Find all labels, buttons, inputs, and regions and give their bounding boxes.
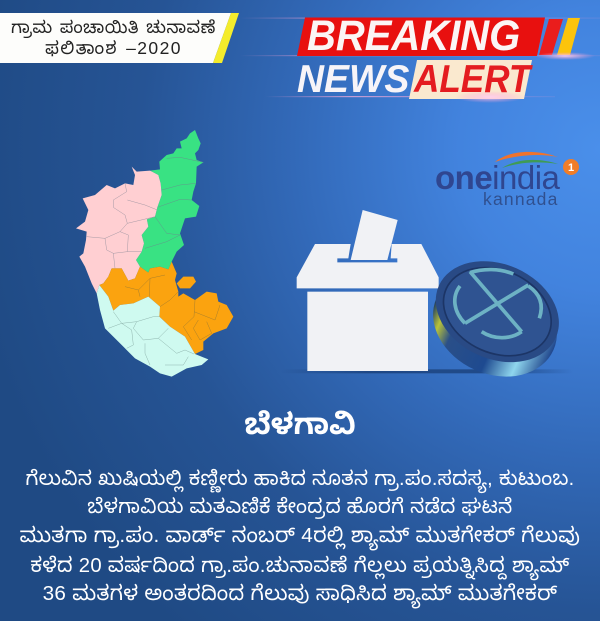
icon: ballot box: [296, 210, 564, 377]
map region: pale cyan south: [97, 285, 208, 377]
breaking news alert graphic: NEWS: [297, 58, 409, 101]
text line 3: ಮುತಗಾ ಗ್ರಾ.ಪಂ. ವಾರ್ಡ್ ನಂಬರ್ 4ರಲ್ಲಿ ಶ್ಯಾಮ್ ಮುತಗೇಕರ್ ಗೆಲುವು: [20, 524, 580, 547]
text line 5: 36 ಮತಗಳ ಅಂತರದಿಂದ ಗೆಲುವು ಸಾಧಿಸಿದ ಶ್ಯಾಮ್ ಮುತಗೇಕರ್: [43, 582, 557, 605]
header banner: election results: ಗ್ರಾಮ ಪಂಚಾಯಿತಿ ಚುನಾವಣೆ: [11, 18, 216, 37]
map region: pink north-west: [76, 167, 162, 293]
logo: oneindia kannada: kannada: [483, 189, 559, 209]
logo: oneindia kannada: oneindia: [435, 159, 559, 196]
breaking news alert graphic: [246, 12, 600, 102]
breaking news alert graphic: ALERT: [414, 58, 530, 101]
text line 2: ಬೆಳಗಾವಿಯ ಮತಎಣಿಕೆ ಕೇಂದ್ರದ ಹೊರಗೆ ನಡೆದ ಘಟನೆ: [87, 496, 513, 518]
icon: election symbol coin: [416, 242, 575, 396]
logo: oneindia kannada: [435, 152, 579, 209]
map region: green north-east: [136, 130, 203, 273]
header banner: election results: ಫಲಿತಾಂಶ –2020: [45, 38, 182, 58]
logo: oneindia kannada: 1: [568, 162, 574, 174]
map: Karnataka regions: [76, 130, 234, 377]
heading: Belagavi: ಬೆಳಗಾವಿ: [244, 408, 356, 441]
header banner: election results: [0, 13, 239, 63]
text line 1: ಗೆಲುವಿನ ಖುಷಿಯಲ್ಲಿ ಕಣ್ಣೀರು ಹಾಕಿದ ನೂತನ ಗ್ರಾ.ಪಂ.ಸದಸ್ಯ, ಕುಟುಂಬ.: [25, 468, 575, 490]
breaking news alert graphic: BREAKING: [307, 12, 520, 60]
text line 4: ಕಳೆದ 20 ವರ್ಷದಿಂದ ಗ್ರಾ.ಪಂ.ಚುನಾವಣೆ ಗೆಲ್ಲಲು ಪ್ರಯತ್ನಿಸಿದ್ದ ಶ್ಯಾಮ್: [30, 555, 570, 577]
map region: orange south-east: [99, 262, 233, 354]
